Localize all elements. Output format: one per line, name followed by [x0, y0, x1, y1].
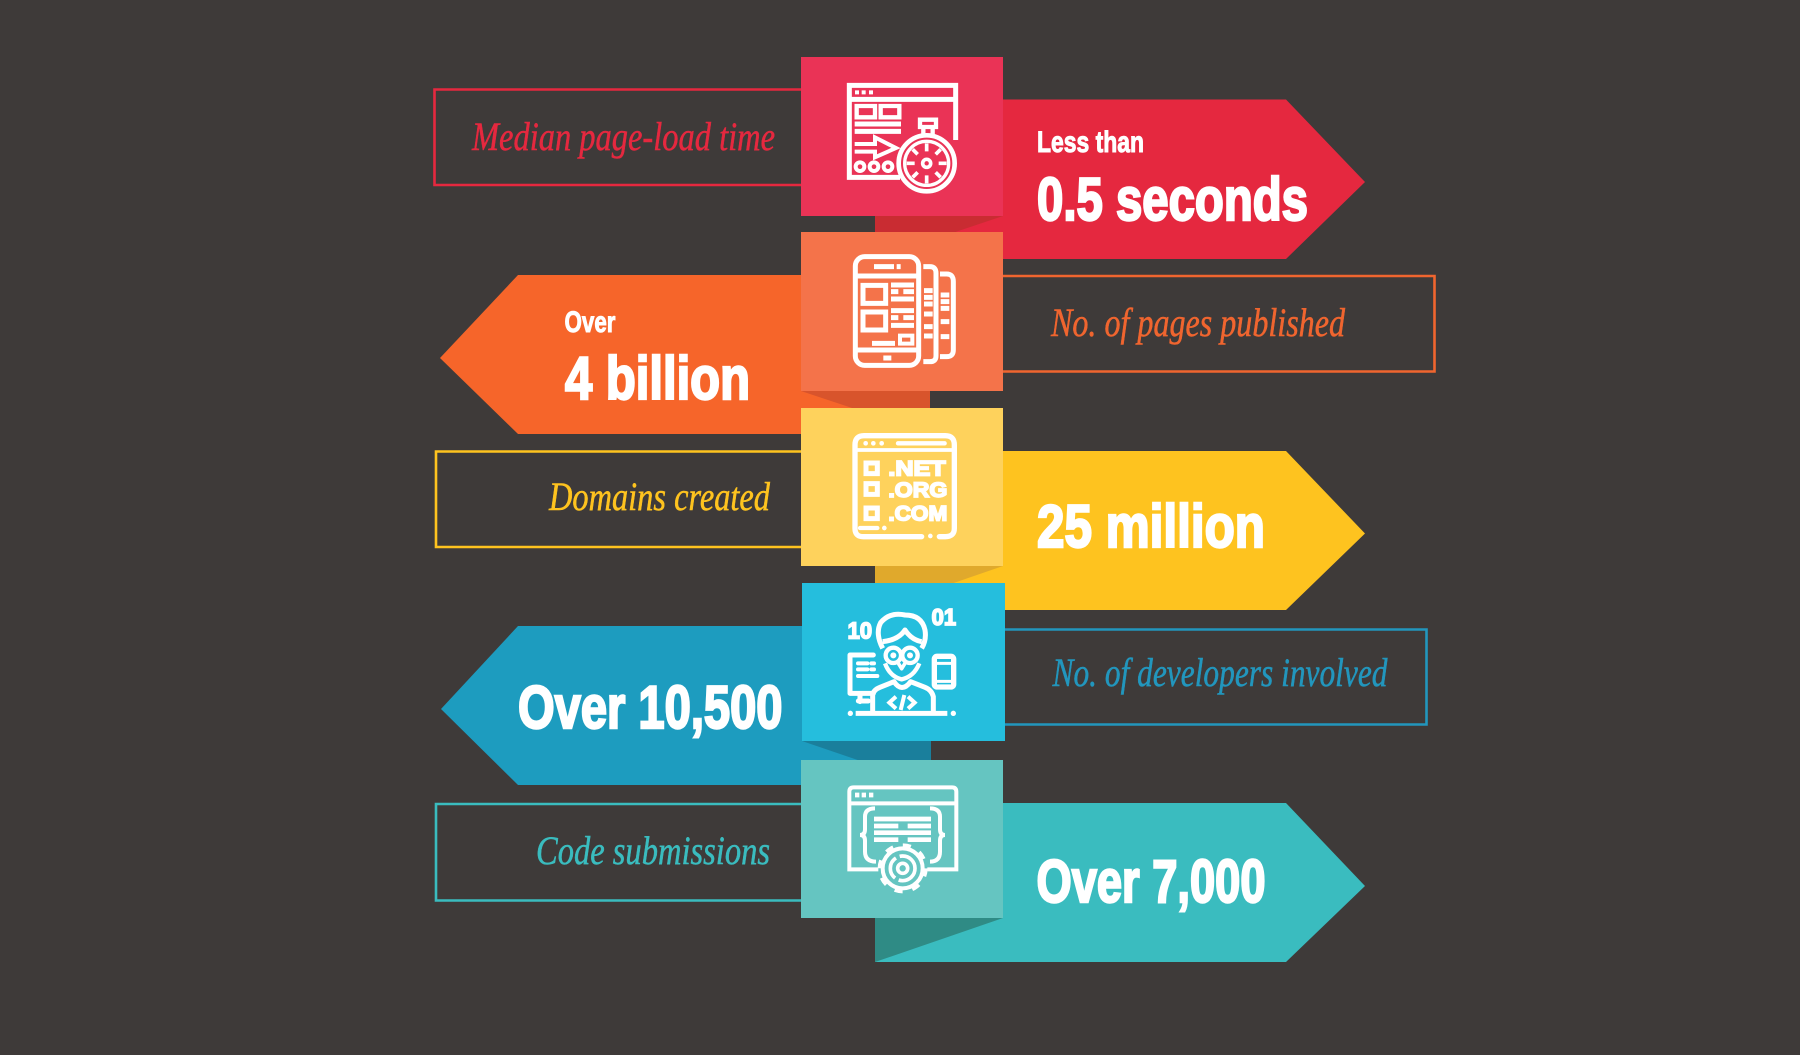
icon: stacked phone pages — [855, 257, 953, 365]
icon: domain names window: .ORG — [888, 478, 947, 502]
icon: domain names window: .COM — [888, 501, 947, 525]
fold shadow: orange — [801, 391, 930, 434]
value: over: Over — [564, 306, 616, 339]
fold shadow: yellow — [875, 566, 1003, 610]
square: blue icon tile — [802, 583, 1005, 741]
square: red icon tile — [801, 57, 1003, 216]
label box: code submissions — [436, 804, 801, 900]
arrow: blue value — [441, 626, 931, 785]
fold shadow: blue — [802, 741, 931, 785]
panel: domains created — [436, 408, 1365, 610]
icon: developer with devices: 10 — [848, 618, 872, 644]
panel: developers involved — [441, 583, 1426, 785]
icon: web page with stopwatch — [849, 85, 956, 191]
arrow: red value — [875, 100, 1365, 259]
value: 0.5 seconds: 0.5 seconds — [1037, 166, 1308, 233]
label box: median page-load time — [434, 90, 801, 185]
icon: domain names window: .NET — [888, 456, 946, 480]
icon: developer with devices — [848, 604, 956, 716]
square: yellow icon tile — [801, 408, 1003, 566]
label box: pages published — [1003, 276, 1434, 372]
icon: developer with devices: 01 — [932, 604, 956, 630]
label box: developers involved — [1005, 630, 1426, 724]
arrow: yellow value — [875, 451, 1365, 610]
square: orange icon tile — [801, 232, 1003, 391]
value: over 10,500: Over 10,500 — [518, 674, 782, 741]
value: 25 million: 25 million — [1037, 493, 1265, 560]
fold shadow: teal — [875, 918, 1003, 962]
label: developers involved: No. of developers involved — [1052, 650, 1388, 695]
panel: median page-load time — [434, 57, 1365, 259]
label: median page-load time: Median page-load time — [471, 114, 775, 159]
value: 4 billion: 4 billion — [565, 345, 750, 412]
label box: domains created — [436, 452, 801, 547]
value: less than: Less than — [1037, 126, 1144, 159]
label: pages published: No. of pages published — [1050, 300, 1346, 345]
panel: pages published — [440, 232, 1434, 434]
arrow: teal value — [875, 803, 1365, 962]
label: code submissions: Code submissions — [536, 828, 770, 873]
icon: code window with gear — [849, 787, 956, 891]
panel: code submissions — [436, 760, 1365, 962]
fold shadow: red — [875, 216, 1003, 259]
arrow: orange value — [440, 275, 930, 434]
icon: domain names window — [855, 436, 954, 538]
value: over 7,000: Over 7,000 — [1036, 848, 1266, 915]
square: teal icon tile — [801, 760, 1003, 918]
label: domains created: Domains created — [548, 474, 771, 519]
